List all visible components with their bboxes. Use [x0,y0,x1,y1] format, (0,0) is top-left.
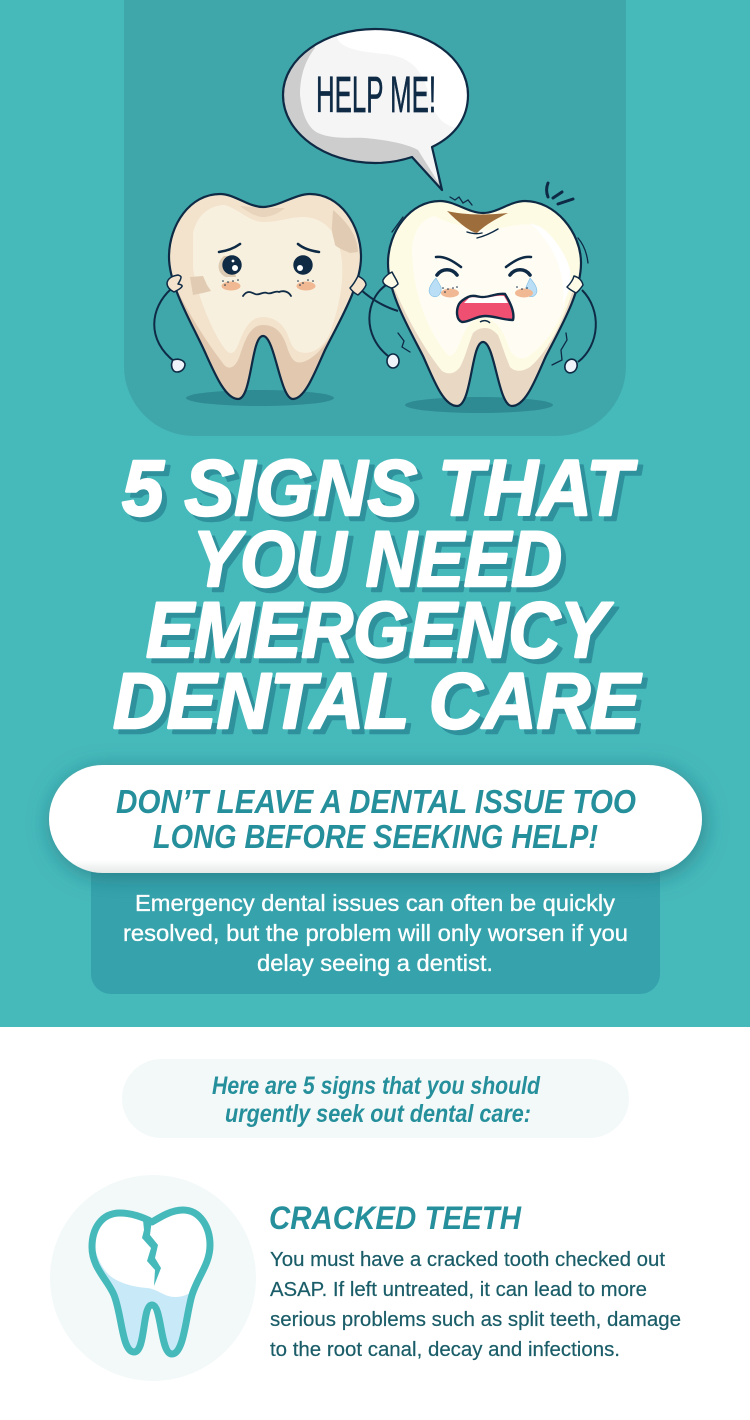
subtitle text: DON’T LEAVE A DENTAL ISSUE TOO [116,783,636,820]
section: cracked teeth [269,1200,681,1361]
title [113,443,647,750]
subtitle text: LONG BEFORE SEEKING HELP! [153,818,598,855]
body text: serious problems such as split teeth, damage [270,1309,681,1331]
intro box [91,860,660,994]
speech bubble [283,20,480,190]
subtitle pill [49,765,702,873]
bubble text: HELP ME! [316,66,436,123]
icon: cracked tooth [50,1175,256,1381]
outline [388,201,581,406]
title text: EMERGENCY [146,585,614,674]
illustration panel [124,0,626,436]
face [219,244,319,296]
arms [369,285,596,362]
title shadow: YOU NEED [198,519,567,608]
subtitle text [116,783,636,855]
lead-in text: urgently seek out dental care: [225,1100,531,1128]
title text [113,443,642,745]
intro text: Emergency dental issues can often be quickly [135,890,615,916]
title shadow: DENTAL CARE [118,661,647,750]
title shadow: 5 SIGNS THAT [127,448,642,537]
outline [169,194,361,399]
worried tooth [154,190,398,405]
ground shadows [186,390,553,413]
cavity edge [467,229,498,238]
title text: 5 SIGNS THAT [122,443,637,532]
intro text: delay seeing a dentist. [257,950,493,976]
arms [154,289,398,362]
intro text: resolved, but the problem will only worsen if you [123,920,628,946]
lead-in pill [122,1059,629,1138]
lead-in text [212,1072,541,1128]
body text: You must have a cracked tooth checked out [270,1249,665,1271]
title text: YOU NEED [193,514,562,603]
body text [270,1249,681,1361]
hands [383,272,398,288]
body text: to the root canal, decay and infections. [270,1339,620,1361]
body text: ASAP. If left untreated, it can lead to more [270,1279,647,1301]
header background [0,0,750,1027]
title text: DENTAL CARE [113,656,642,745]
face [429,257,537,323]
crying tooth [369,183,596,410]
title shadow [118,448,647,750]
heading: CRACKED TEETH [269,1200,522,1236]
intro text [123,890,628,976]
title shadow: EMERGENCY [151,590,619,679]
shock marks [546,183,573,204]
hands [167,275,182,292]
lead-in text: Here are 5 signs that you should [212,1072,541,1100]
